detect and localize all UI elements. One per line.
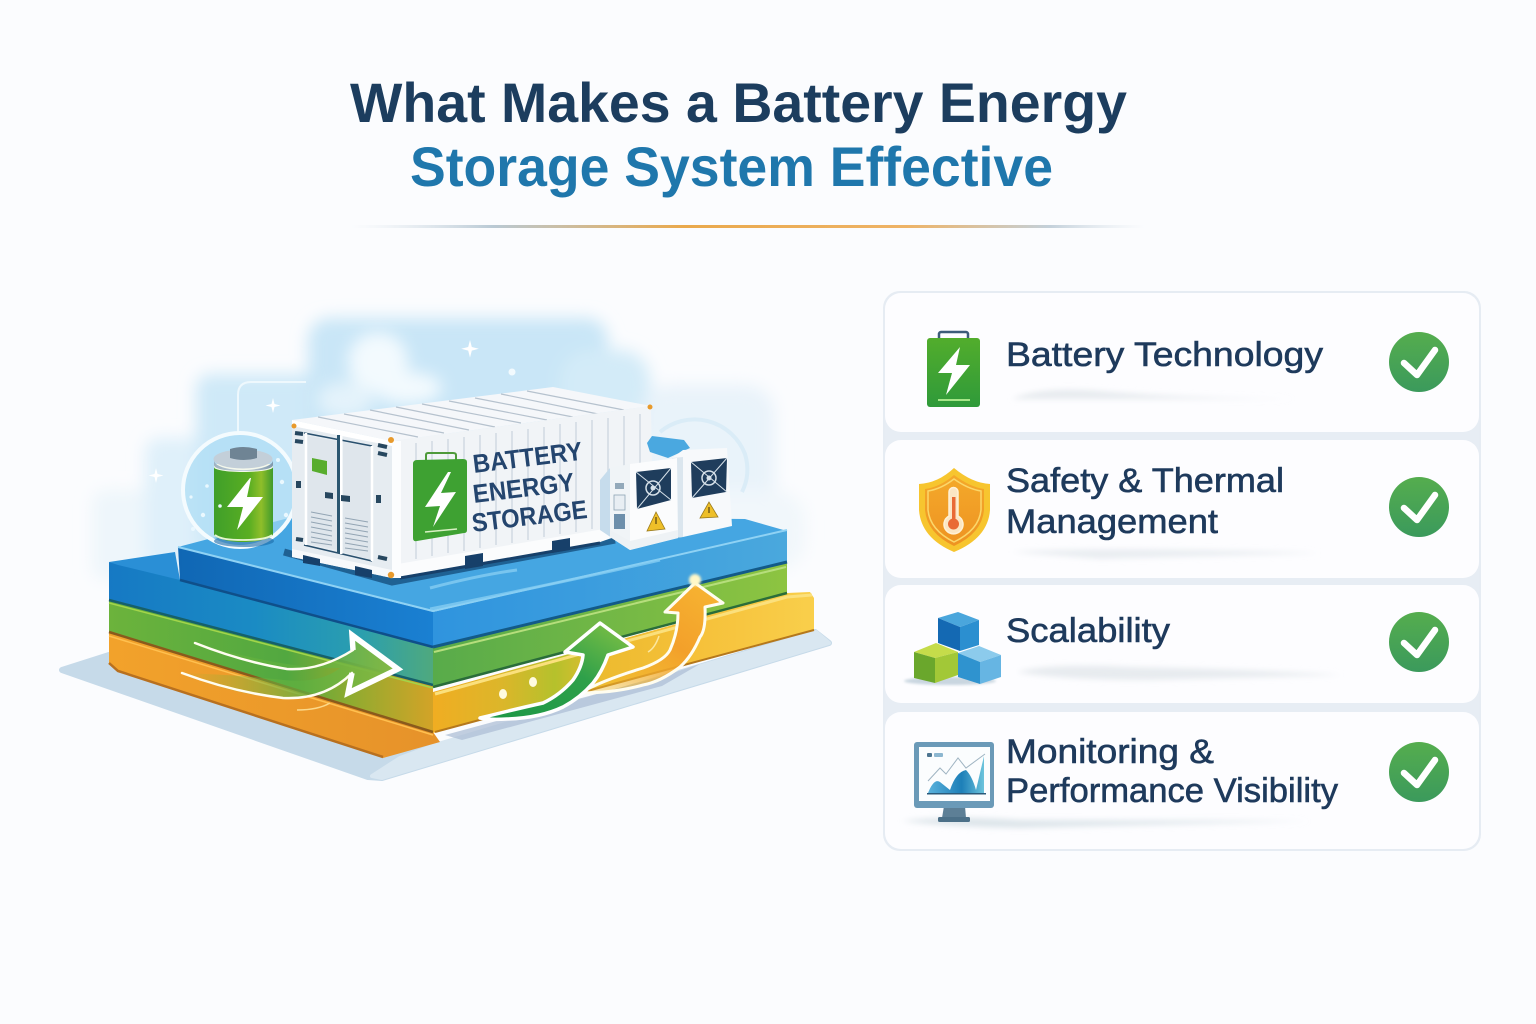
label second line: Management xyxy=(1006,503,1219,541)
lower blue layer left face xyxy=(109,562,433,685)
cabinet one fan grille xyxy=(636,468,671,509)
orange base layer left face xyxy=(109,633,440,758)
cooling cabinets xyxy=(600,436,732,550)
panel backing xyxy=(884,292,1480,850)
card: battery technology xyxy=(885,293,1479,432)
title: What Makes a Battery Energy xyxy=(350,71,1127,134)
corner fittings xyxy=(292,404,652,578)
storage container xyxy=(292,387,653,578)
warning triangle xyxy=(700,502,718,518)
title xyxy=(350,71,1127,198)
icon: shield with thermometer xyxy=(919,468,990,552)
label: Safety & Thermal xyxy=(1006,462,1284,500)
title: Storage System Effective xyxy=(410,135,1053,198)
container roof xyxy=(292,387,651,441)
container battery logo xyxy=(413,453,467,541)
arrow glow and sparks xyxy=(499,574,701,699)
green battery cell xyxy=(214,447,273,542)
label: Monitoring & xyxy=(1006,733,1214,771)
check badge xyxy=(1389,612,1449,672)
cabinet two fan grille xyxy=(691,458,727,498)
text underline smudge xyxy=(1017,666,1342,680)
text underline smudge xyxy=(1012,549,1320,559)
title divider xyxy=(350,225,1145,228)
lower blue ledge xyxy=(109,552,180,580)
cabinet one xyxy=(600,458,678,550)
stacked layers xyxy=(109,515,814,758)
ground plate xyxy=(62,632,829,778)
flow arrow: orange xyxy=(580,583,723,693)
container label xyxy=(470,436,589,538)
raised plate left face xyxy=(178,547,433,647)
background haze and clouds xyxy=(92,318,805,580)
flow arrow: dark green xyxy=(480,623,633,719)
card: monitoring and performance visibility xyxy=(885,712,1479,849)
yellow layer right face xyxy=(433,592,814,733)
icon: battery xyxy=(927,332,980,407)
container side wall xyxy=(392,406,653,578)
container front doors xyxy=(292,420,401,578)
check badge xyxy=(1389,477,1449,537)
icon: stacked cubes xyxy=(904,612,1001,685)
container label: ENERGY xyxy=(471,467,576,509)
text underline smudge xyxy=(902,818,1310,828)
illustration: battery energy storage site xyxy=(62,318,829,778)
flow arrow: green xyxy=(182,635,398,710)
container shadow xyxy=(284,540,615,582)
green layer left face xyxy=(109,600,433,732)
icon: monitor with chart xyxy=(914,742,994,822)
label: Battery Technology xyxy=(1006,336,1323,374)
blue duct xyxy=(647,436,690,458)
panel: checklist xyxy=(884,292,1480,850)
cabinet two xyxy=(672,448,732,538)
blue layer top surface xyxy=(178,515,787,612)
top surface highlights xyxy=(430,560,660,609)
battery orb xyxy=(183,433,297,547)
text underline smudge xyxy=(1012,390,1295,399)
container label: STORAGE xyxy=(470,494,589,538)
card: scalability xyxy=(885,585,1479,703)
label: Scalability xyxy=(1006,612,1170,650)
card: safety and thermal management xyxy=(885,440,1479,578)
container label: BATTERY xyxy=(471,436,584,479)
green layer right face xyxy=(433,562,787,687)
warning triangle xyxy=(647,512,665,531)
blue layer right face xyxy=(433,530,787,647)
check badge xyxy=(1389,742,1449,802)
label second line: Performance Visibility xyxy=(1006,772,1338,810)
check badge xyxy=(1389,332,1449,392)
